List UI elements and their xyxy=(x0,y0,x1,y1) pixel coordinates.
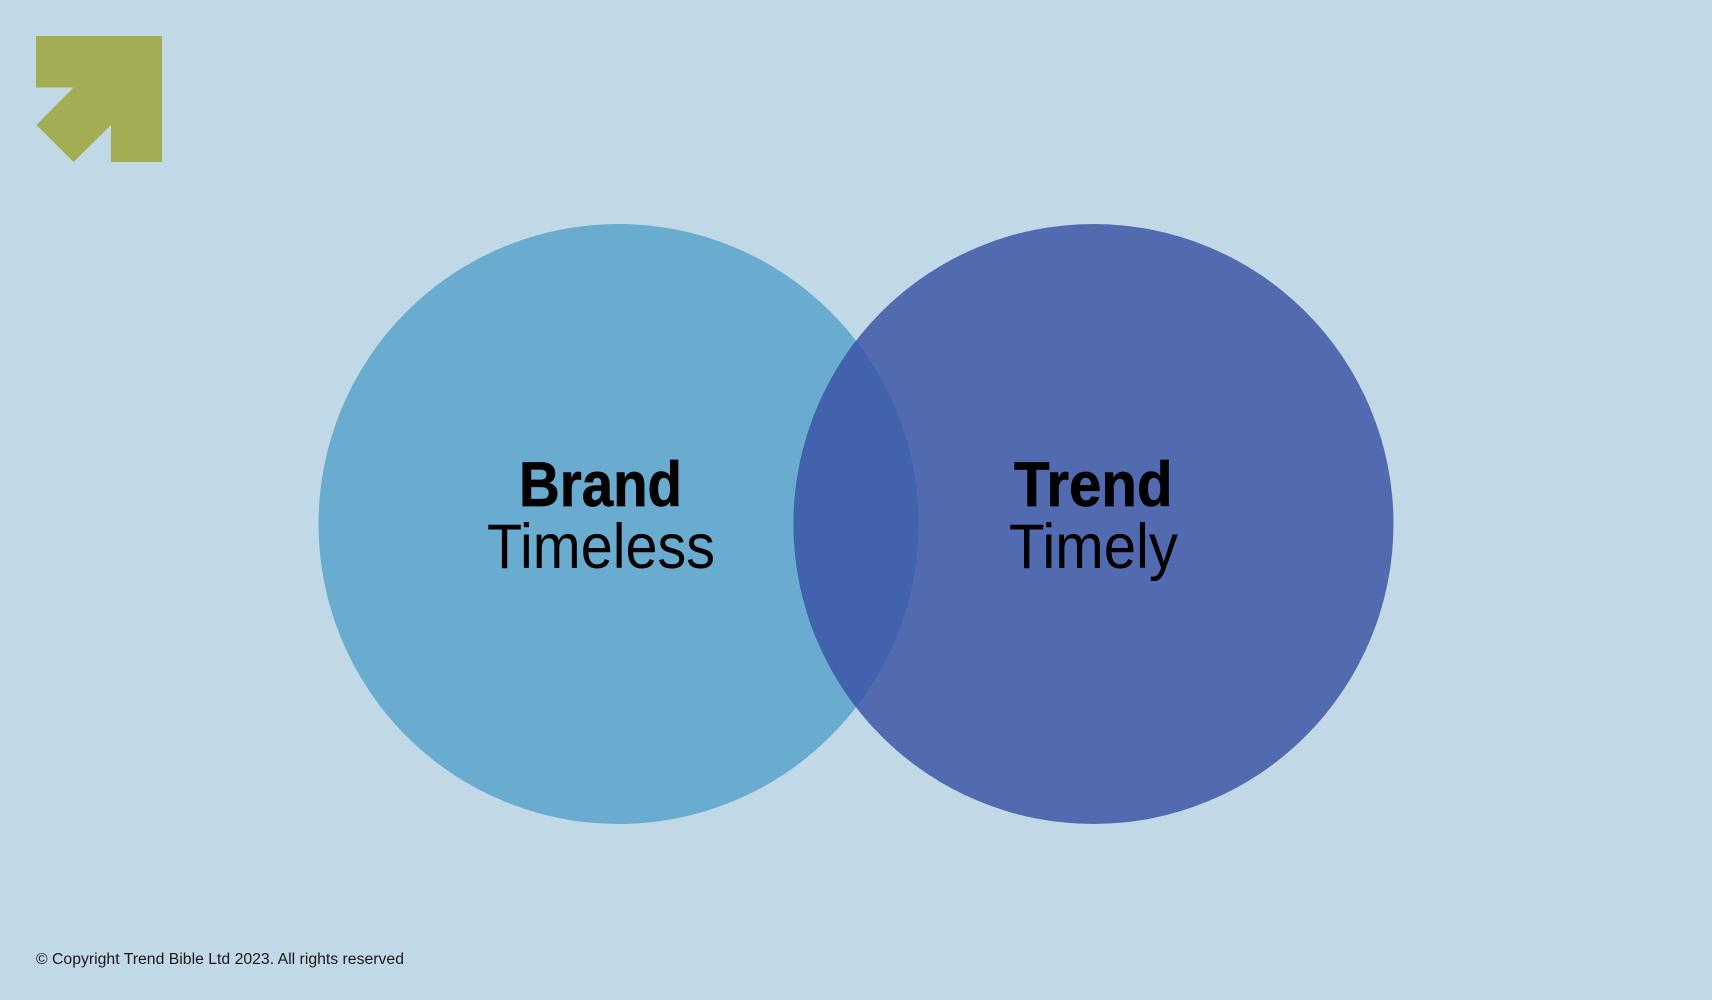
label: brand: Timeless xyxy=(487,512,715,582)
icon: logo arrow xyxy=(36,36,162,162)
circle: trend xyxy=(794,224,1394,824)
overlap xyxy=(793,341,919,707)
label: trend: Trend xyxy=(1014,450,1172,520)
label: trend: Timely xyxy=(1009,512,1178,582)
footer copyright: © Copyright Trend Bible Ltd 2023. All rights reserved xyxy=(36,951,404,968)
label: brand xyxy=(487,450,715,582)
label: trend xyxy=(1009,450,1178,582)
circle: brand xyxy=(318,224,918,824)
venn diagram xyxy=(318,224,1394,824)
label: brand: Brand xyxy=(519,450,682,520)
